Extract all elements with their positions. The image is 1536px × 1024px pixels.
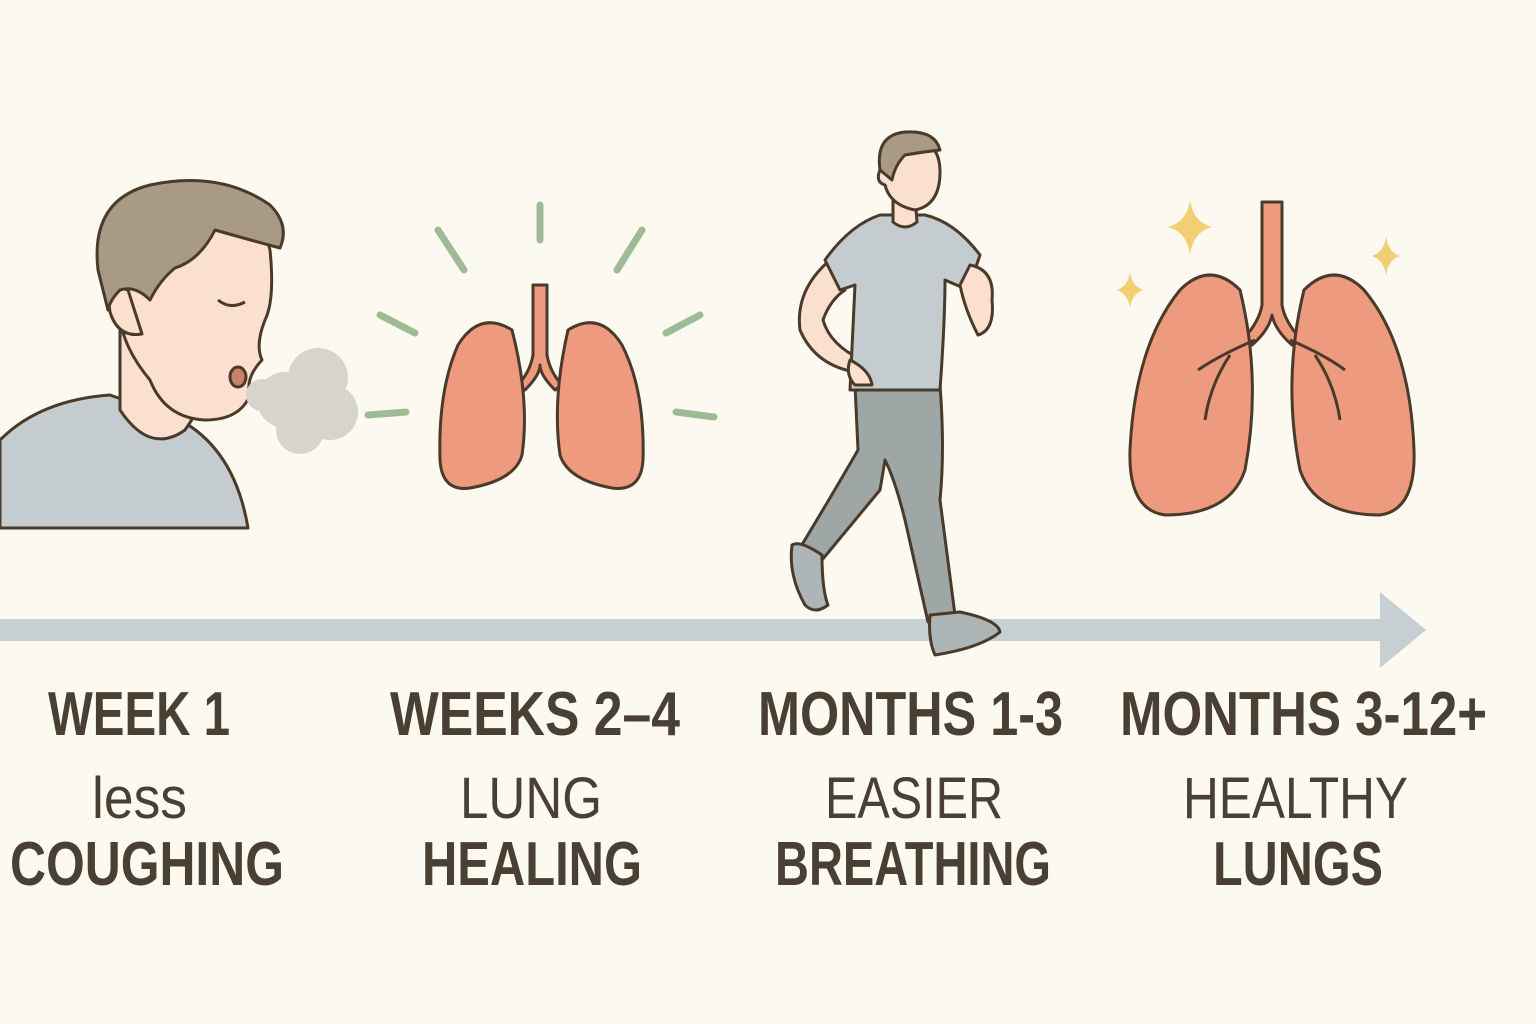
icon: jogging man [791,132,1000,655]
label: months 1-3: BREATHING [775,830,1051,899]
face [105,190,272,420]
label: week 1: COUGHING [10,830,284,899]
eye [218,300,245,306]
label: week 1 [10,680,284,899]
front arm [960,265,992,335]
icon: healing lungs with rays [368,205,714,488]
label: months 1-3 [758,680,1063,899]
label: weeks 2-4: HEALING [422,830,642,899]
label: months 3-12+: HEALTHY [1183,766,1408,831]
head [878,138,940,210]
legs [800,385,955,622]
neck [893,195,917,227]
icon: healthy lungs with sparkles [1117,200,1414,515]
hand [848,360,872,385]
label: week 1: WEEK 1 [48,680,230,749]
hair [97,180,283,310]
label: months 1-3: MONTHS 1-3 [758,680,1063,749]
shirt [0,395,248,528]
timeline arrow [0,592,1426,668]
neck [120,330,205,439]
label: week 1: less [92,766,187,831]
torso [825,215,980,390]
icon: cough cloud [246,348,358,454]
label: weeks 2-4: LUNG [460,766,602,831]
label: months 3-12+: LUNGS [1213,830,1383,899]
label: months 1-3: EASIER [825,766,1003,831]
shoes [791,544,828,610]
mouth [230,367,246,387]
label: months 3-12+ [1120,680,1487,899]
label: weeks 2-4: WEEKS 2–4 [390,680,680,749]
back arm [799,260,862,372]
ear [109,288,142,335]
label: weeks 2-4 [390,680,680,899]
icon: coughing man [0,180,283,528]
